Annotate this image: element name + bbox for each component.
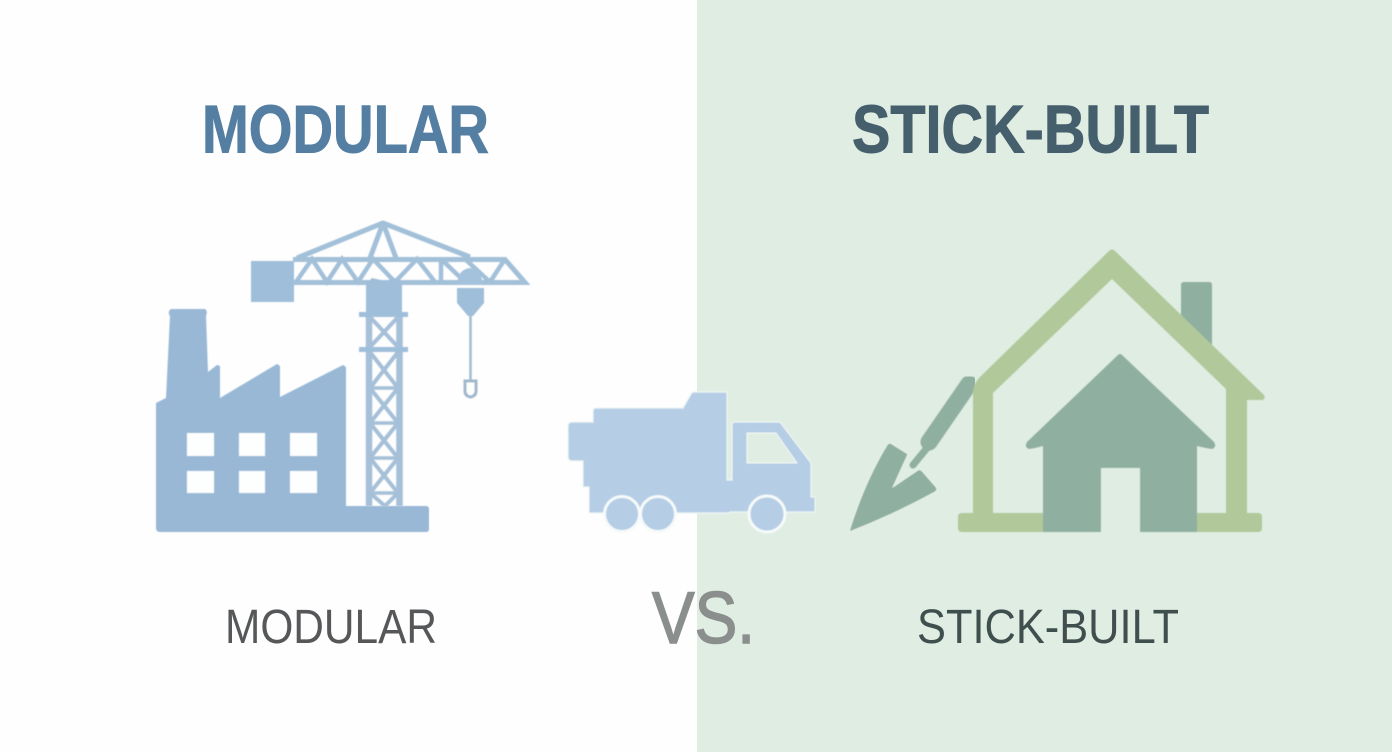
- chimney: [1181, 282, 1212, 346]
- trolley and hook block: [457, 268, 484, 316]
- counterweight: [251, 261, 294, 302]
- icon: tower crane: [251, 223, 525, 506]
- label: vs: VS.: [652, 578, 755, 659]
- factory silhouette: [156, 309, 429, 532]
- label: stick-built: STICK-BUILT: [917, 601, 1179, 654]
- icon: house: [958, 250, 1265, 534]
- label: modular: MODULAR: [225, 601, 437, 654]
- icon: delivery truck: [568, 392, 815, 532]
- factory windows: [187, 433, 317, 493]
- heading: modular: MODULAR: [202, 92, 489, 168]
- icon: trowel: [849, 384, 969, 532]
- panel: stick-built background: [697, 0, 1392, 752]
- trowel handle: [929, 384, 969, 442]
- panel: modular background: [0, 0, 697, 752]
- inner house door: [1101, 468, 1140, 534]
- trowel neck: [913, 448, 927, 465]
- truck wheels: [604, 496, 785, 532]
- jib truss: [293, 259, 525, 282]
- icon: factory: [156, 309, 429, 532]
- inner house: [1026, 354, 1215, 532]
- trowel blade: [849, 443, 937, 532]
- tower cab and collars: [359, 278, 408, 352]
- hook cable: [469, 316, 472, 381]
- house outline: [958, 250, 1265, 532]
- hook: [465, 381, 476, 397]
- tower lattice: [368, 312, 401, 506]
- cab window: [747, 433, 797, 463]
- truck body and cab: [568, 392, 815, 513]
- heading: stick-built: STICK-BUILT: [852, 92, 1209, 168]
- jib ties and apex: [297, 223, 470, 258]
